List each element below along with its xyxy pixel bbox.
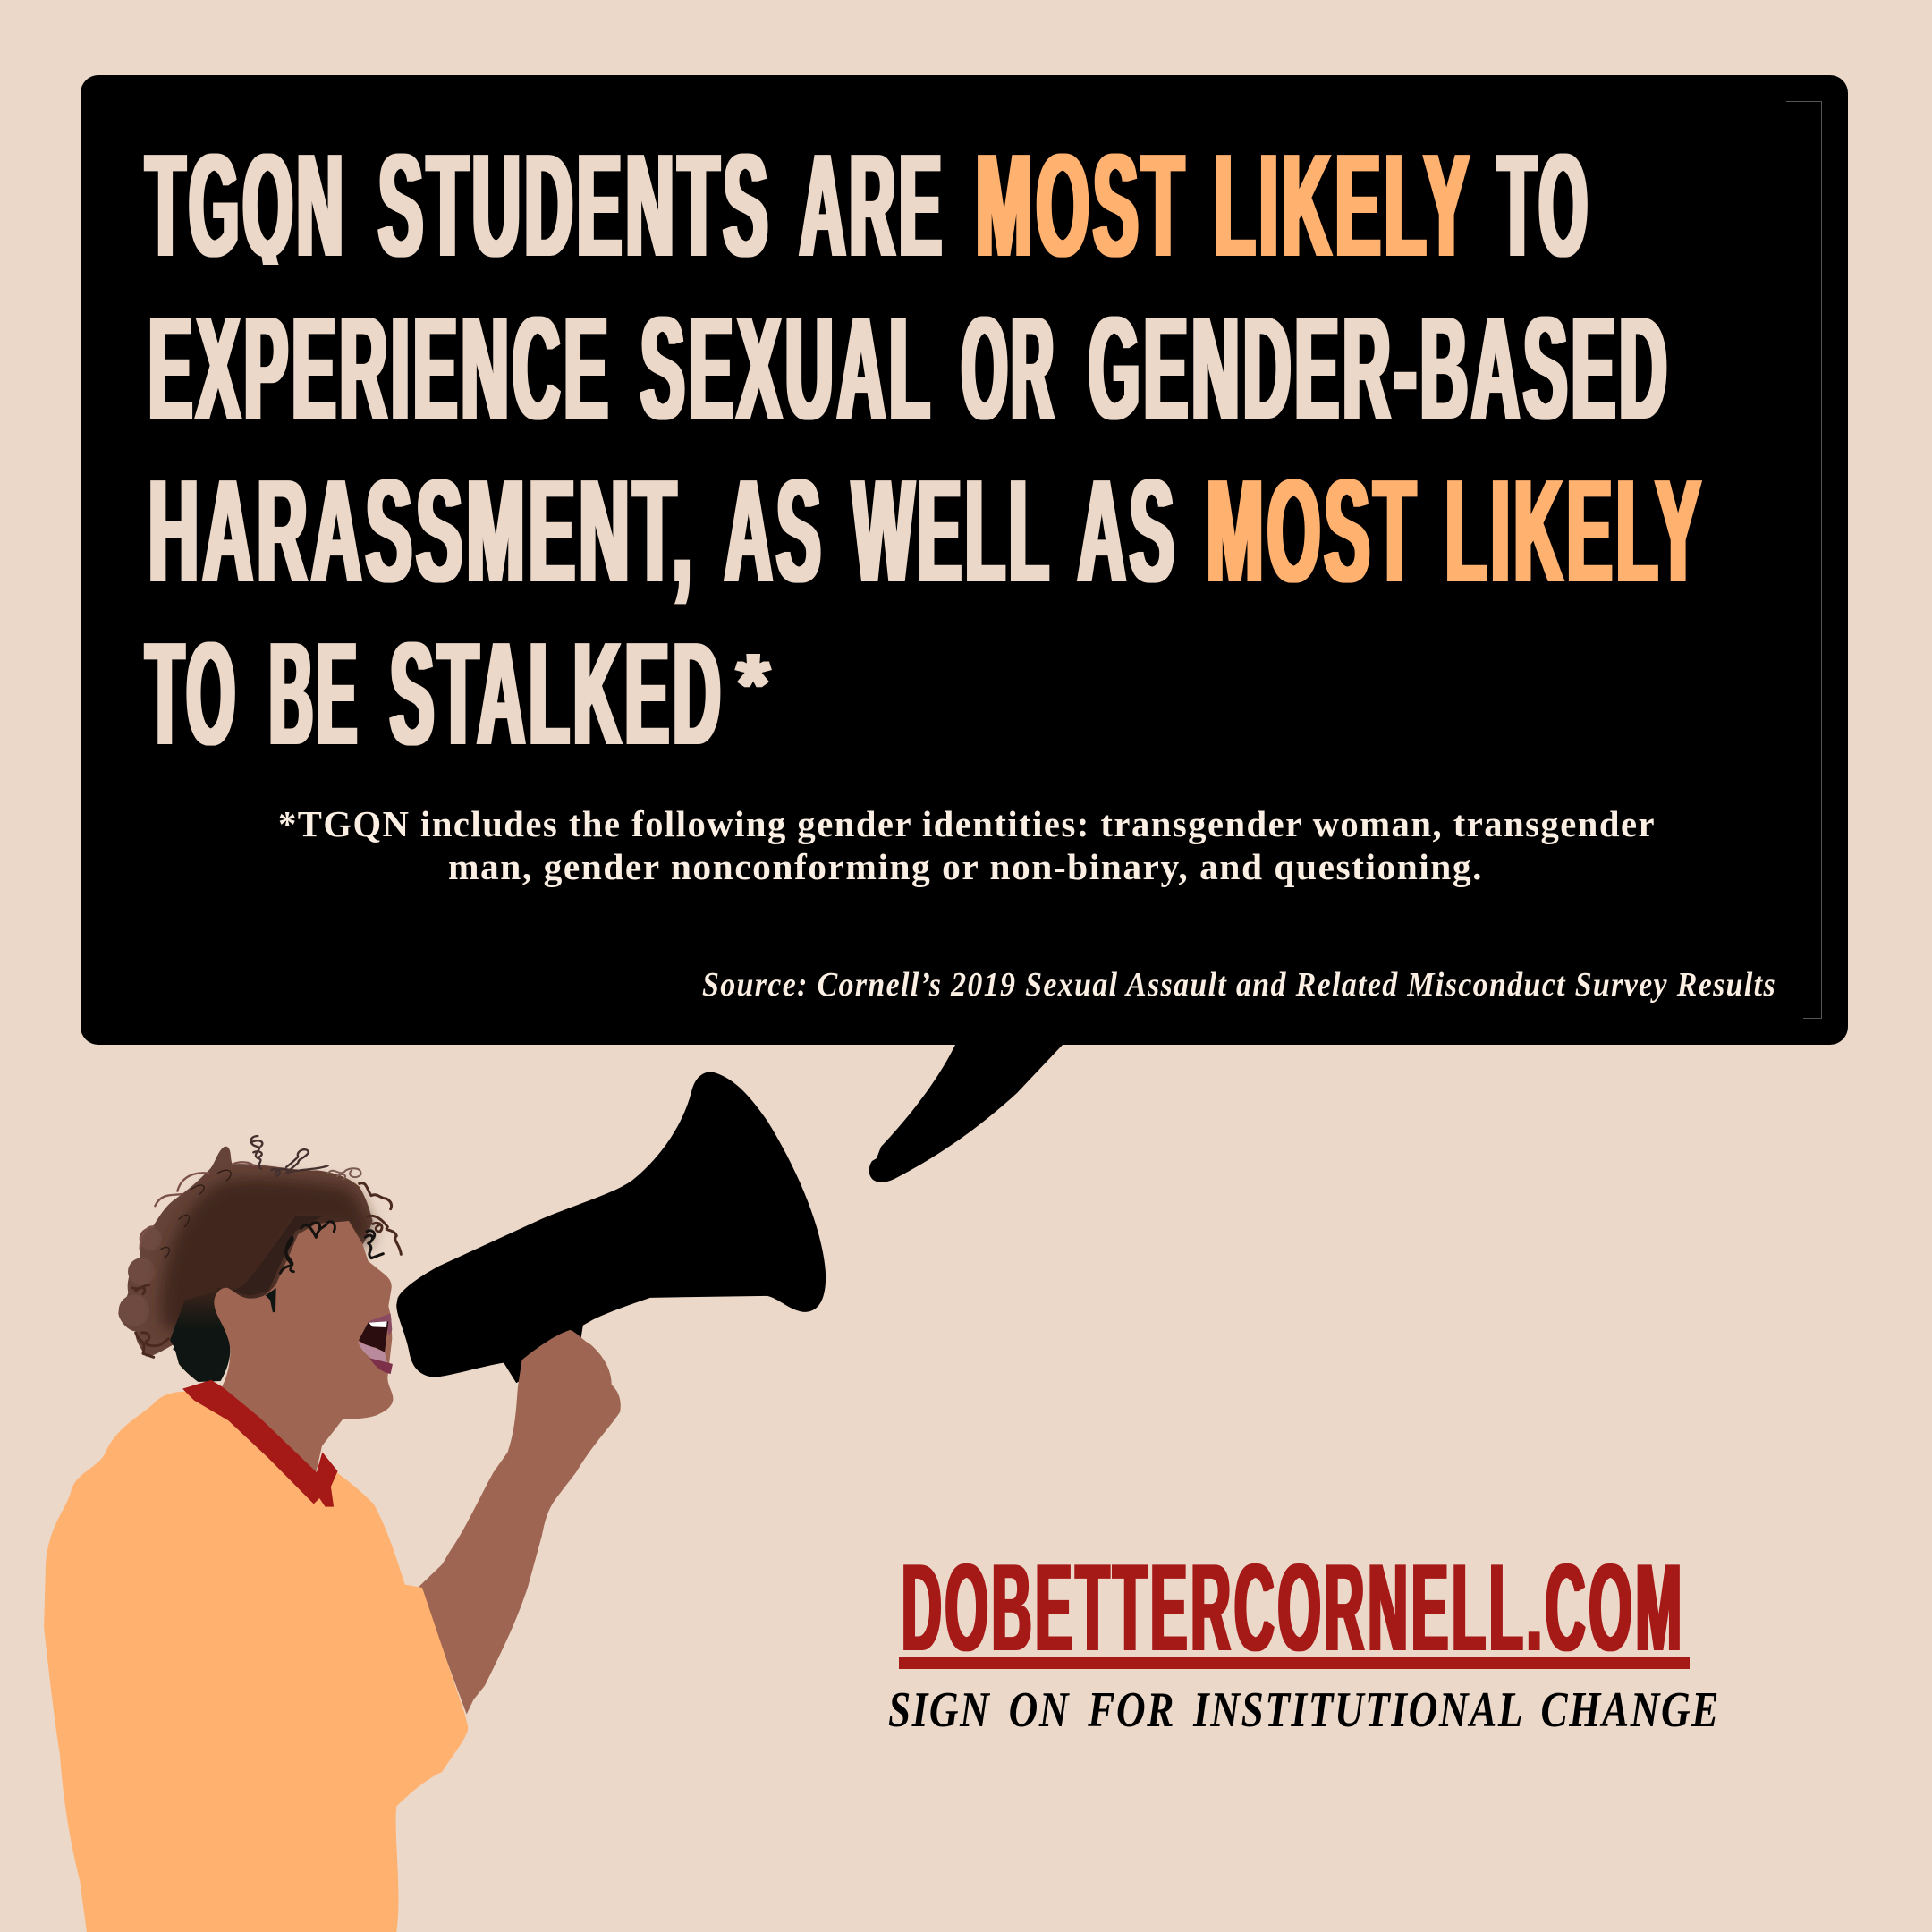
hair and head [118,1136,401,1479]
heading [146,123,1705,775]
footnote: TGQN definition: *TGQN includes the following gender identities: transgender woman, transgender [278,803,1656,844]
speech bubble tail [869,1038,1063,1182]
heading: SEXUAL [640,286,934,450]
heading: TGQN [146,123,347,287]
heading: OR [962,286,1057,450]
heading: AS [1078,449,1178,613]
hairline shadow [215,1216,322,1300]
heading: HARASSMENT, [148,449,696,613]
heading: TO [1498,123,1591,287]
arm and fist [419,1330,621,1715]
heading: * [737,635,769,735]
shirt [44,1389,468,1932]
heading: MOST [976,123,1188,287]
heading: MOST [1207,449,1419,613]
heading: TO [146,612,239,775]
heading: BE [269,612,360,775]
source line: Source: Cornell’s 2019 Sexual Assault and Related Misconduct Survey Results [702,966,1776,1004]
footnote: TGQN definition [278,803,1656,887]
website underline [899,1657,1690,1669]
heading: AS [724,449,825,613]
heading: WELL [852,449,1053,613]
shirt collar [182,1380,338,1507]
icon: megaphone [396,1072,826,1383]
panel: speech bubble [80,75,1848,1182]
curls [132,1136,401,1366]
heading: EXPERIENCE [148,286,612,450]
heading: ARE [800,123,945,287]
heading: STALKED [390,612,724,775]
heading: LIKELY [1214,123,1473,287]
footnote: TGQN definition: man, gender nonconforming or non-binary, and questioning. [448,846,1483,887]
illustration: person with megaphone [44,1072,826,1932]
call to action: SIGN ON FOR INSTITUTIONAL CHANGE [888,1682,1720,1738]
heading: STUDENTS [378,123,772,287]
mouth [358,1313,393,1374]
